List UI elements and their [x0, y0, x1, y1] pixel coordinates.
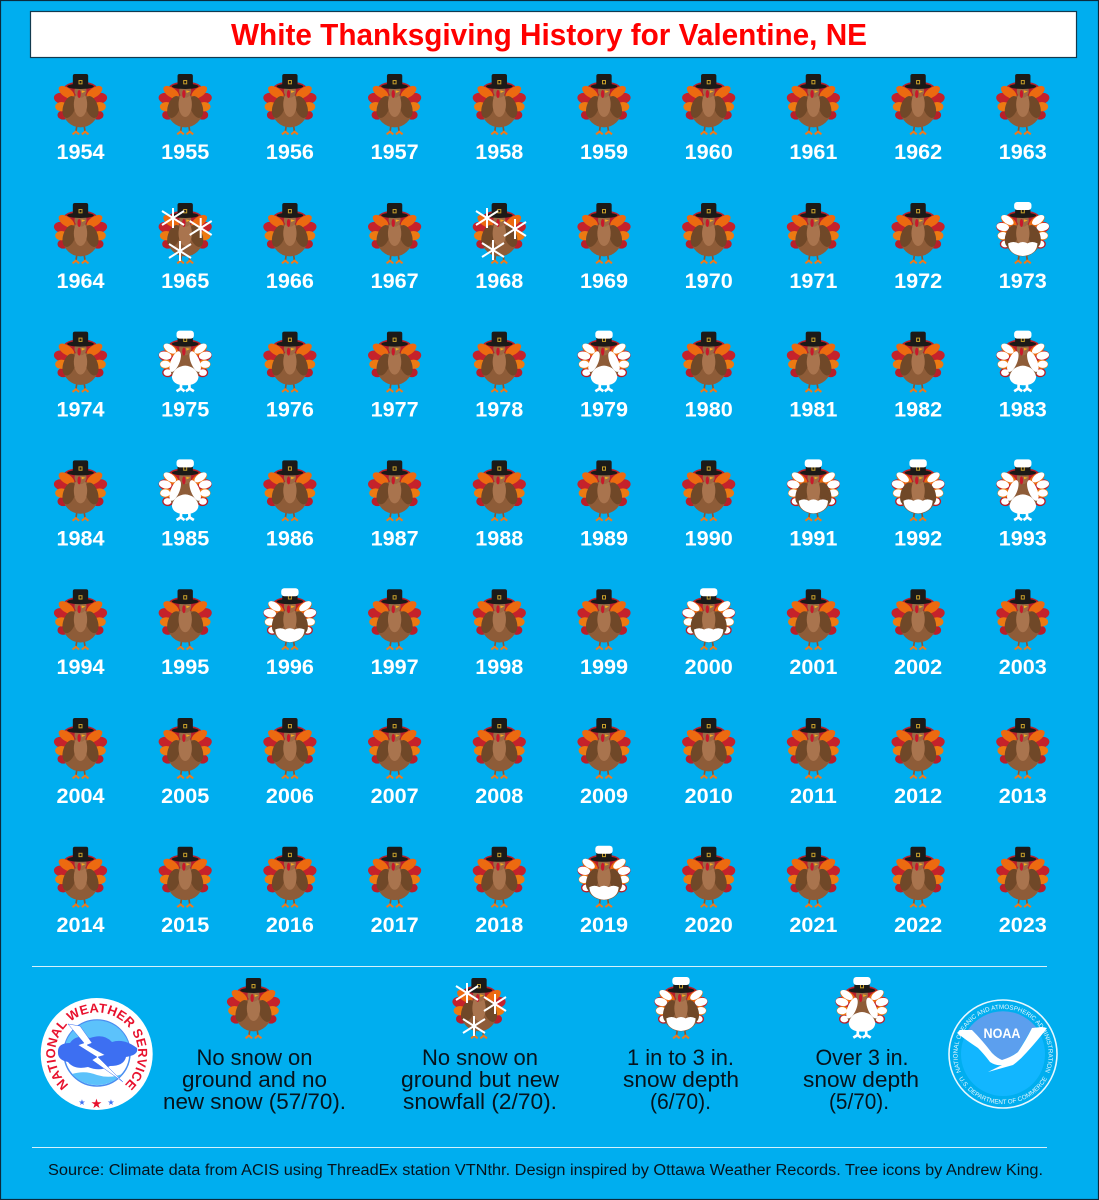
year 1968: 1968: [475, 268, 523, 293]
year 2012: 2012: [894, 783, 942, 808]
year 1962: 1962: [894, 139, 942, 164]
legend: new snowfall: No snow on: [422, 1045, 538, 1070]
year 1959: 1959: [580, 139, 628, 164]
year 1960: [681, 74, 736, 164]
year 2016: [262, 847, 318, 937]
year 2010: [681, 718, 736, 808]
year 1977: [367, 332, 422, 422]
legend: 1 to 3 in: snow depth: [623, 1067, 739, 1092]
legend: over 3 in: (5/70).: [829, 1089, 889, 1114]
year 2019: 2019: [580, 912, 628, 937]
year 1985: 1985: [161, 525, 209, 550]
year 1957: [367, 74, 422, 164]
year 2014: [53, 847, 108, 937]
year 1972: [890, 203, 946, 293]
year 1982: 1982: [894, 397, 942, 422]
year 1984: 1984: [56, 525, 105, 550]
legend: new snowfall: [401, 978, 559, 1114]
year 1992: 1992: [894, 525, 942, 550]
year 1958: 1958: [475, 139, 523, 164]
year 2003: [995, 589, 1050, 679]
legend: no snow: new snow (57/70).: [163, 1089, 346, 1114]
year 1958: [472, 74, 527, 164]
year 2001: [786, 589, 841, 679]
year 1983: [995, 331, 1050, 422]
logo: NOAA: NATIONAL OCEANIC AND ATMOSPHERIC ADMINISTRATION: [953, 1004, 1053, 1073]
year 1987: [367, 460, 422, 550]
year 1977: 1977: [371, 397, 419, 422]
year 2017: [367, 847, 422, 937]
logo: National Weather Service: ★: [107, 1098, 115, 1107]
year 2015: 2015: [161, 912, 209, 937]
legend: no snow: ground and no: [182, 1067, 327, 1092]
year 2010: 2010: [685, 783, 733, 808]
year 2023: [995, 847, 1050, 937]
year 1973: [995, 202, 1050, 293]
year 1997: [367, 589, 422, 679]
year 2007: 2007: [371, 783, 419, 808]
title: White Thanksgiving History for Valentine, NE: [231, 17, 867, 52]
year 2011: [786, 718, 841, 808]
year 1960: 1960: [685, 139, 733, 164]
year 1999: 1999: [580, 654, 628, 679]
year 1994: [53, 589, 108, 679]
year 2006: 2006: [266, 783, 314, 808]
year 1988: 1988: [475, 525, 523, 550]
year 2009: 2009: [580, 783, 628, 808]
year 2006: [262, 718, 318, 808]
legend: over 3 in: snow depth: [803, 1067, 919, 1092]
year 2003: 2003: [999, 654, 1047, 679]
year 2014: 2014: [56, 912, 105, 937]
year 1976: 1976: [266, 397, 314, 422]
year 1962: [890, 74, 946, 164]
legend: no snow: No snow on: [196, 1045, 312, 1070]
year 2020: 2020: [685, 912, 733, 937]
year 1979: [576, 331, 632, 422]
year 2005: [158, 718, 213, 808]
year 2001: 2001: [789, 654, 837, 679]
logo: NOAA: [948, 999, 1058, 1109]
year 1978: [472, 332, 527, 422]
logo: NOAA: U.S. DEPARTMENT OF COMMERCE: [960, 1076, 1048, 1104]
year 1985: [158, 459, 213, 550]
year 2021: 2021: [789, 912, 837, 937]
legend: over 3 in: Over 3 in.: [816, 1045, 908, 1070]
year 1966: 1966: [266, 268, 314, 293]
year 1996: [262, 588, 318, 679]
year 2020: [681, 847, 736, 937]
year 1961: 1961: [789, 139, 837, 164]
year 1963: [995, 74, 1050, 164]
year 1981: 1981: [789, 397, 837, 422]
legend: 1 to 3 in: 1 in to 3 in.: [627, 1045, 734, 1070]
year 1955: [158, 74, 213, 164]
year 1954: [53, 74, 108, 164]
year 2004: [53, 718, 108, 808]
year 1989: [576, 460, 632, 550]
year 1964: [53, 203, 108, 293]
year 2005: 2005: [161, 783, 209, 808]
year 1968: [472, 203, 527, 293]
year 1991: 1991: [789, 525, 837, 550]
year 1959: [576, 74, 632, 164]
year 1955: 1955: [161, 139, 209, 164]
year 2015: [158, 847, 213, 937]
year 1994: 1994: [56, 654, 105, 679]
legend: no snow: [163, 978, 346, 1114]
year 1989: 1989: [580, 525, 628, 550]
legend: new snowfall: ground but new: [401, 1067, 559, 1092]
year 1974: 1974: [56, 397, 105, 422]
year 2023: 2023: [999, 912, 1047, 937]
year 1982: [890, 332, 946, 422]
year 1966: [262, 203, 318, 293]
year 1971: [786, 203, 841, 293]
legend: new snowfall: snowfall (2/70).: [403, 1089, 557, 1114]
year 1987: 1987: [371, 525, 419, 550]
year 1991: [786, 459, 841, 550]
year 1975: [158, 331, 213, 422]
year 1996: 1996: [266, 654, 314, 679]
year 2019: [576, 846, 632, 937]
logo: National Weather Service: ★: [91, 1096, 102, 1111]
year 2013: [995, 718, 1050, 808]
year 2009: [576, 718, 632, 808]
year 1974: [53, 332, 108, 422]
year 1981: [786, 332, 841, 422]
year 1967: 1967: [371, 268, 419, 293]
year 1980: 1980: [685, 397, 733, 422]
year 2007: [367, 718, 422, 808]
year 1965: 1965: [161, 268, 209, 293]
year 2011: 2011: [790, 783, 837, 808]
year 1992: [890, 459, 946, 550]
year 1986: [262, 460, 318, 550]
year 2004: 2004: [56, 783, 105, 808]
year 1976: [262, 332, 318, 422]
year 1973: 1973: [999, 268, 1047, 293]
year 1969: [576, 203, 632, 293]
year 1957: 1957: [371, 139, 419, 164]
year 2000: [681, 588, 736, 679]
year 1970: 1970: [685, 268, 733, 293]
year 1956: 1956: [266, 139, 314, 164]
year 1979: 1979: [580, 397, 628, 422]
legend: 1 to 3 in: (6/70).: [650, 1089, 711, 1114]
year 1978: 1978: [475, 397, 523, 422]
year 1999: [576, 589, 632, 679]
year 1995: [158, 589, 213, 679]
year 1983: 1983: [999, 397, 1047, 422]
year 2000: 2000: [685, 654, 733, 679]
year 2016: 2016: [266, 912, 314, 937]
year 2022: [890, 847, 946, 937]
year 2018: 2018: [475, 912, 523, 937]
logo: National Weather Service: ★: [78, 1098, 86, 1107]
year 1965: [158, 203, 213, 293]
year 2013: 2013: [999, 783, 1047, 808]
year 1993: [995, 459, 1050, 550]
year 1967: [367, 203, 422, 293]
year 1970: [681, 203, 736, 293]
year 1984: [53, 460, 108, 550]
year 1995: 1995: [161, 654, 209, 679]
logo: National Weather Service: NATIONAL WEATHER SERVICE: [46, 1003, 148, 1090]
year 2022: 2022: [894, 912, 942, 937]
year 1998: [472, 589, 527, 679]
year 1963: 1963: [999, 139, 1047, 164]
legend: over 3 in: [803, 977, 919, 1114]
year 1997: 1997: [371, 654, 419, 679]
year 2021: [786, 847, 841, 937]
year 2008: 2008: [475, 783, 523, 808]
year 1998: 1998: [475, 654, 523, 679]
year 2018: [472, 847, 527, 937]
year 1988: [472, 460, 527, 550]
year 1986: 1986: [266, 525, 314, 550]
logo: NOAA: NOAA: [984, 1025, 1020, 1041]
year 1969: 1969: [580, 268, 628, 293]
year 1956: [262, 74, 318, 164]
year 2002: [890, 589, 946, 679]
year 1964: 1964: [56, 268, 105, 293]
year 1990: 1990: [685, 525, 733, 550]
legend: 1 to 3 in: [623, 977, 739, 1114]
year 1993: 1993: [999, 525, 1047, 550]
year 1975: 1975: [161, 397, 209, 422]
year 2012: [890, 718, 946, 808]
source note: Source: Climate data from ACIS using ThreadEx station VTNthr. Design inspired by Ottawa Weather Records. Tree icons by Andrew King.: [48, 1162, 1043, 1179]
year 2008: [472, 718, 527, 808]
year 1980: [681, 332, 736, 422]
year 1954: 1954: [56, 139, 105, 164]
year 2017: 2017: [371, 912, 419, 937]
year 1972: 1972: [894, 268, 942, 293]
title: [30, 12, 1076, 58]
year 1971: 1971: [789, 268, 837, 293]
year 1961: [786, 74, 841, 164]
year 2002: 2002: [894, 654, 942, 679]
year 1990: [681, 460, 736, 550]
